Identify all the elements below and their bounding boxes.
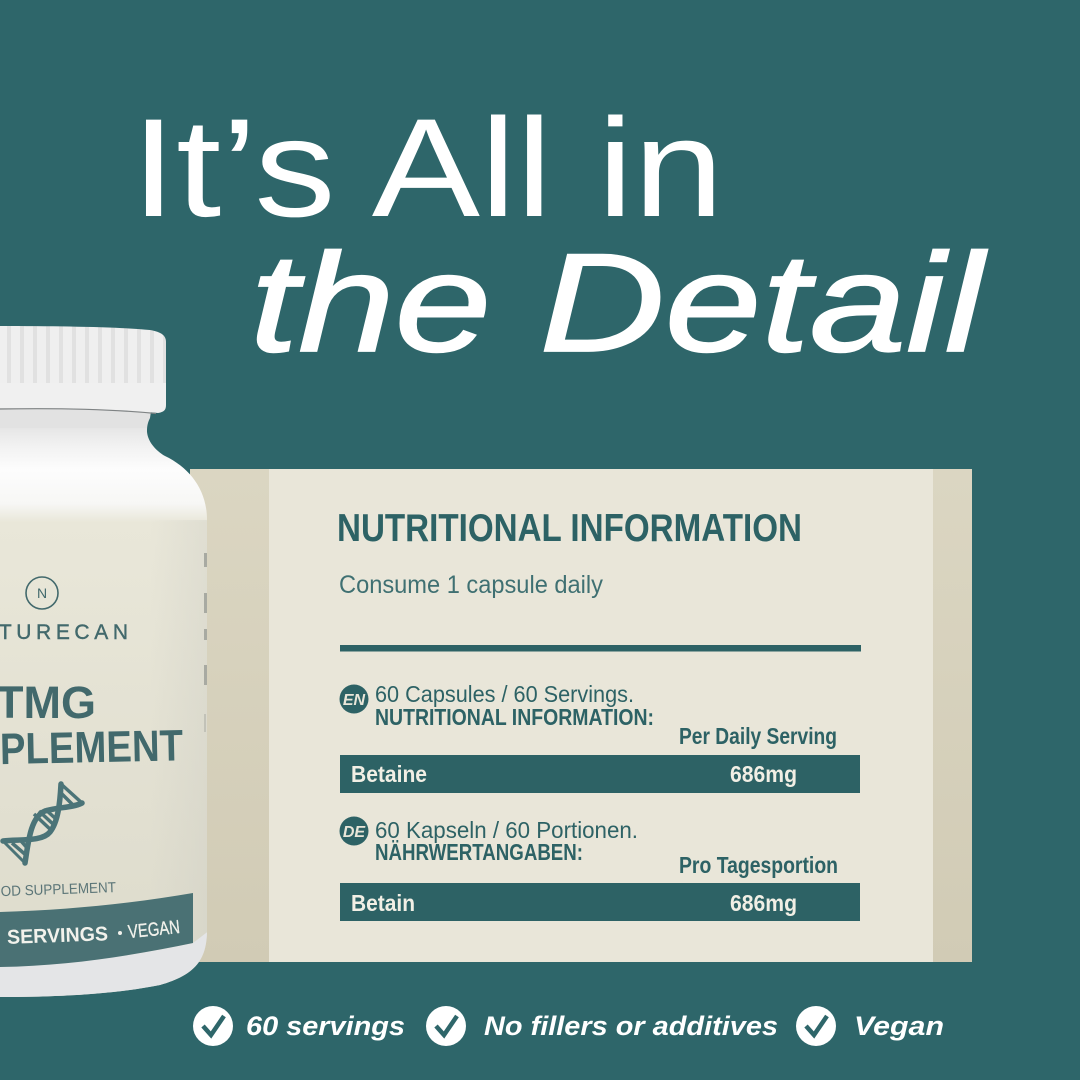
feature list: [193, 1006, 944, 1046]
table row: Betaine: 686mg: [730, 761, 797, 787]
right edge shading: [197, 520, 207, 714]
band text servings: SERVINGS: [7, 923, 108, 949]
table row: Betaine: [340, 755, 860, 793]
bottle cap: [0, 326, 166, 414]
bottle neck: [0, 405, 152, 432]
band dot: [118, 931, 122, 935]
badge: EN: [340, 684, 368, 714]
English subheading: NUTRITIONAL INFORMATION:: [375, 704, 654, 730]
English section: [340, 681, 860, 793]
label main area: [269, 469, 933, 962]
feature: vegan: Vegan: [854, 1011, 944, 1041]
bottle label and lower section: [0, 520, 210, 1000]
supplement bottle: [0, 326, 210, 1000]
panel heading: NUTRITIONAL INFORMATION: [337, 507, 802, 550]
panel: nutritional information label: [190, 469, 972, 962]
column heading: Per Daily Serving: [679, 723, 837, 749]
table row: Betain: Betain: [351, 890, 415, 916]
cap gap line: [0, 409, 156, 414]
side label marks: [204, 553, 207, 732]
table row: Betain: [340, 883, 860, 921]
icon: check 1: [193, 1006, 233, 1046]
table row: Betaine: Betaine: [351, 761, 427, 787]
feature: no fillers: No fillers or additives: [484, 1011, 778, 1041]
title line: It's All in: It’s All in: [131, 90, 724, 246]
label right flap: [933, 469, 972, 962]
bottle base: [0, 930, 210, 1000]
title line: the Detail: the Detail: [250, 225, 988, 381]
bottle body: [0, 428, 207, 997]
icon: DNA helix: [3, 784, 82, 863]
cap lower ring: [0, 383, 166, 413]
German column heading: Pro Tagesportion: [679, 852, 838, 878]
label left flap: [190, 469, 269, 962]
German subheading: NÄHRWERTANGABEN:: [375, 839, 583, 865]
icon: check 2: [426, 1006, 466, 1046]
infographic canvas: [0, 114, 989, 1046]
badge: DE: DE: [343, 824, 366, 841]
feature: 60 servings: 60 servings: [246, 1011, 405, 1041]
capsule count German: 60 Kapseln / 60 Portionen.: [375, 817, 638, 843]
badge: DE: [340, 816, 368, 846]
brand logo: [26, 577, 58, 609]
cap ribbed section: [0, 326, 166, 384]
green label band: [0, 893, 193, 967]
capsule count: 60 Capsules / 60 Servings.: [375, 681, 634, 707]
table row: Betain: 686mg: [730, 890, 797, 916]
German section: [340, 816, 860, 921]
icon: check 3: [796, 1006, 836, 1046]
dosage text: Consume 1 capsule daily: [339, 571, 603, 599]
badge: EN: EN: [343, 692, 366, 709]
brand logo: N: [37, 585, 47, 601]
title: [131, 90, 988, 381]
band text vegan: VEGAN: [127, 917, 181, 943]
